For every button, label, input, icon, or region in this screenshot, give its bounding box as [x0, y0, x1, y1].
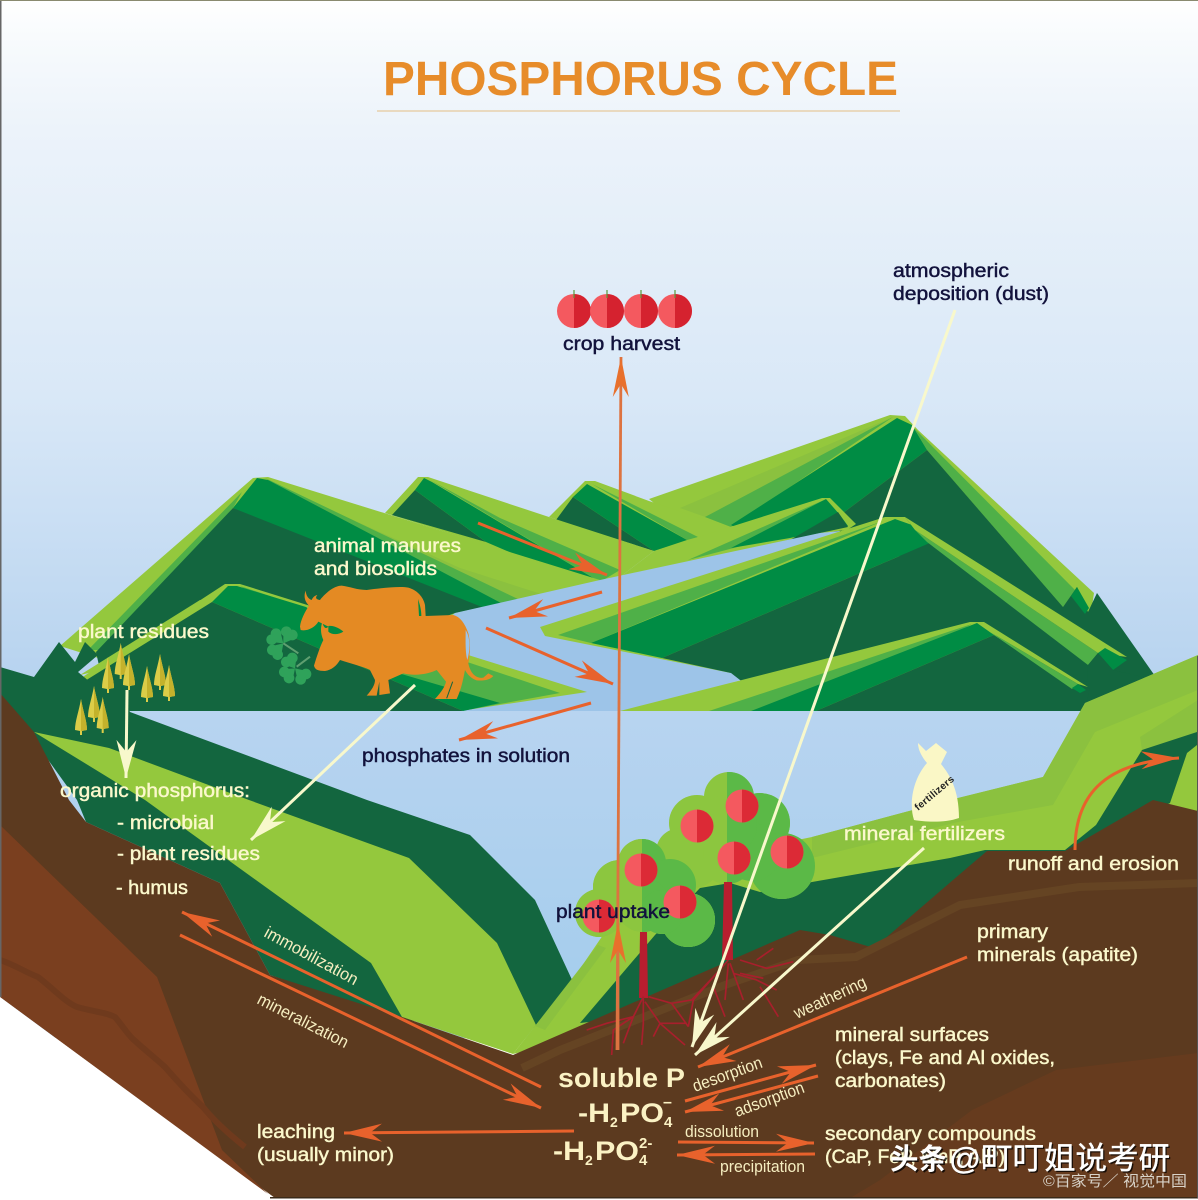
label: organic phosphorus list: - plant residues — [117, 844, 260, 865]
formula: dihydrogen phosphate: 4 — [664, 1114, 673, 1131]
right light green slope — [513, 655, 1198, 1054]
label: organic phosphorus list: organic phosphorus: — [60, 781, 250, 802]
label: animal manures — [314, 536, 461, 580]
label: leaching: (usually minor) — [257, 1145, 394, 1166]
label: organic phosphorus list: - humus — [116, 878, 188, 899]
label: mineral surfaces: mineral surfaces — [835, 1025, 989, 1046]
back right mountain — [649, 415, 1155, 700]
watermark — [890, 1141, 1187, 1190]
watermark: @町叮姐说考研 — [949, 1141, 1170, 1176]
formula: dihydrogen phosphate: 2 — [610, 1114, 618, 1130]
label: organic phosphorus list — [60, 781, 260, 899]
arrow: mineralization — [180, 935, 541, 1108]
label: mineral surfaces: (clays, Fe and Al oxides, — [835, 1048, 1055, 1069]
arrow: surface runoff into stream — [478, 523, 607, 575]
cattle — [300, 586, 493, 699]
watermark: 头条 — [890, 1143, 947, 1176]
icon: harvested apples — [557, 290, 692, 328]
label: secondary compounds: secondary compounds — [825, 1124, 1036, 1145]
sky background — [0, 0, 1198, 720]
arrow: crop harvest — [617, 357, 621, 1050]
arrow: leaching — [344, 1131, 574, 1133]
label: secondary compounds — [825, 1124, 1036, 1168]
arrow: plant residues to organic phosphorus — [126, 690, 127, 778]
label: plant uptake: plant uptake — [556, 902, 670, 923]
arrow: weathering — [698, 957, 967, 1067]
soil — [0, 693, 1198, 1198]
clover — [266, 626, 311, 685]
label: dissolution: dissolution — [685, 1122, 759, 1141]
label: mineral surfaces — [835, 1025, 1055, 1092]
arrow: phosphates in solution — [459, 703, 591, 740]
back ridge — [620, 498, 856, 577]
left fruit tree canopy front — [575, 839, 715, 947]
label: phosphates in solution: phosphates in solution — [362, 746, 570, 767]
arrow: atmospheric deposition — [692, 310, 955, 1047]
formula: dihydrogen phosphate: -H — [578, 1098, 610, 1128]
arrow: precipitation — [677, 1154, 815, 1155]
front right mountain — [620, 622, 1090, 711]
title: PHOSPHORUS CYCLE — [383, 53, 898, 106]
back middle mountain — [549, 481, 727, 552]
arrow: dissolution — [678, 1142, 814, 1143]
label: primary minerals: primary — [977, 922, 1049, 943]
formula: dihydrogen phosphate: PO — [620, 1098, 664, 1128]
watermark: @町叮姐说考研 — [950, 1142, 1172, 1178]
label: organic phosphorus list: - microbial — [117, 813, 214, 834]
label: desorption: desorption — [690, 1053, 765, 1096]
label: atmospheric deposition — [893, 261, 1049, 305]
arrow: immobilization — [182, 912, 541, 1087]
arrow: mineral fertilizers — [695, 848, 924, 1055]
label: mineralization: mineralization — [254, 990, 352, 1052]
formula: hydrogen phosphate: PO — [595, 1136, 639, 1166]
icon: fertilizer bag — [912, 743, 959, 822]
formula: hydrogen phosphate: 2 — [585, 1152, 593, 1168]
label: leaching — [257, 1122, 394, 1166]
left large mountain — [60, 477, 600, 690]
arrow: desorption — [685, 1065, 816, 1101]
label: plant residues: plant residues — [78, 622, 209, 643]
arrow: adsorption — [685, 1076, 818, 1112]
arrow: stream upward flow — [509, 592, 602, 618]
watermark: 头条 — [892, 1144, 948, 1178]
icon: fertilizer bag: fertilizers — [913, 774, 957, 813]
label: crop harvest: crop harvest — [563, 334, 681, 355]
left back mountain — [385, 477, 654, 582]
formula: hydrogen phosphate: -H — [553, 1136, 585, 1166]
label: primary minerals: minerals (apatite) — [977, 945, 1138, 966]
apples: left tree — [582, 854, 697, 932]
label: atmospheric deposition: atmospheric — [893, 261, 1009, 282]
apples: right tree — [680, 790, 804, 874]
roots — [587, 948, 793, 1055]
left fruit tree — [575, 839, 715, 998]
label: mineral fertilizers: mineral fertilizers — [844, 824, 1005, 845]
front left hill — [78, 584, 587, 711]
centre ridge mountain — [540, 517, 1155, 711]
label: secondary compounds: (CaP, FeP, MnP, AlP) — [825, 1147, 1005, 1168]
label: atmospheric deposition: deposition (dust) — [893, 284, 1049, 305]
label: adsorption: adsorption — [732, 1078, 807, 1121]
label: precipitation: precipitation — [720, 1157, 805, 1176]
label: primary minerals — [977, 922, 1138, 966]
label: animal manures: and biosolids — [314, 559, 437, 580]
formula: dihydrogen phosphate — [578, 1094, 673, 1131]
left forest land — [0, 642, 573, 1028]
lake — [0, 708, 1198, 1038]
right fruit tree — [656, 772, 815, 960]
formula: hydrogen phosphate: 4 — [639, 1152, 648, 1169]
watermark: ©百家号／ 视觉中国 — [1043, 1173, 1187, 1190]
label: mineral surfaces: carbonates) — [835, 1071, 946, 1092]
formula: hydrogen phosphate: 2- — [639, 1135, 652, 1152]
arrow: plant uptake — [617, 923, 619, 1050]
label: runoff and erosion: runoff and erosion — [1008, 854, 1179, 875]
forest of yellow trees — [75, 643, 175, 735]
label: immobilization: immobilization — [261, 923, 362, 989]
label: leaching: leaching — [257, 1122, 335, 1143]
label: weathering: weathering — [790, 972, 869, 1023]
label: animal manures: animal manures — [314, 536, 461, 557]
formula: dihydrogen phosphate: – — [663, 1094, 672, 1111]
arrow: runoff and erosion — [1075, 758, 1179, 850]
stream — [420, 531, 840, 711]
arrow: manure to organic phosphorus — [251, 685, 415, 840]
label: soluble P: soluble P — [558, 1063, 685, 1093]
formula: hydrogen phosphate — [553, 1135, 652, 1169]
arrow: stream downstream flow — [486, 628, 613, 684]
left light green slope — [34, 732, 536, 1054]
